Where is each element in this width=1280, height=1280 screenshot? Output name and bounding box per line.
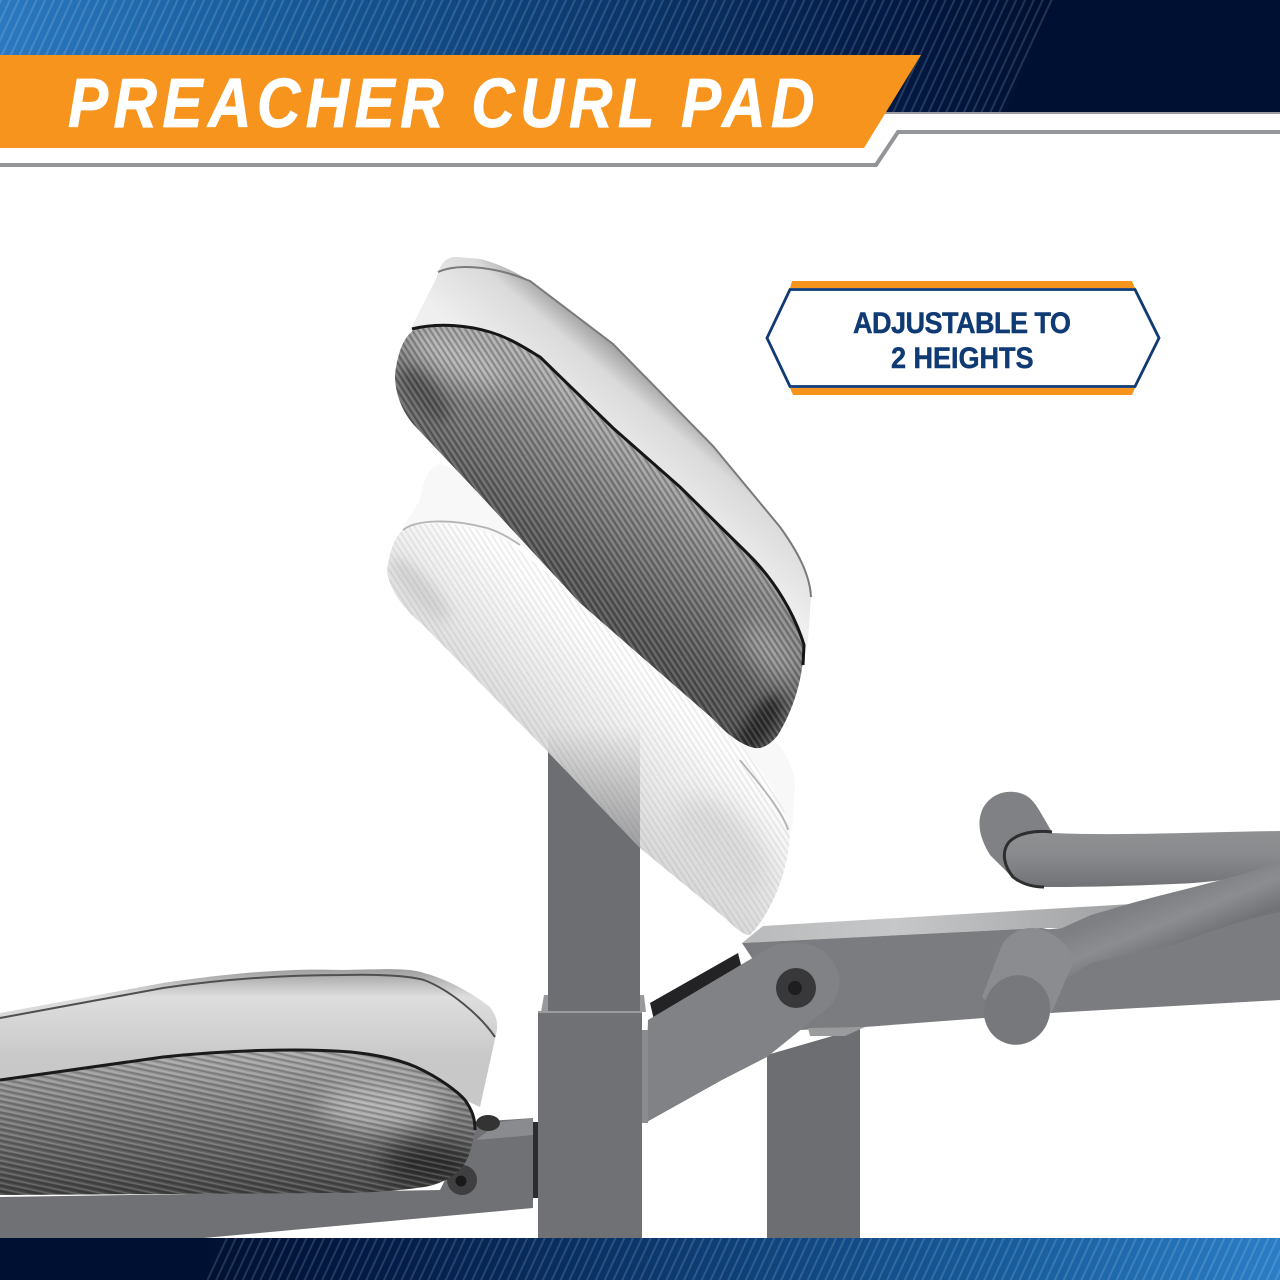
bench seat pad xyxy=(0,969,497,1200)
post seen through ghost pad xyxy=(548,739,640,848)
title banner xyxy=(0,55,921,148)
title: PREACHER CURL PAD xyxy=(68,64,814,142)
pivot bracket with bolt xyxy=(642,943,840,1123)
seat seam xyxy=(0,1050,475,1130)
top position pad xyxy=(380,257,820,761)
ghost pad face xyxy=(380,510,800,940)
post sleeve xyxy=(538,995,646,1238)
header grey rule xyxy=(0,132,1280,165)
seat side xyxy=(0,969,497,1107)
seat face xyxy=(0,1045,480,1200)
footer blue band xyxy=(0,1238,1280,1280)
pad face xyxy=(395,326,802,748)
handle tube xyxy=(1040,862,1280,985)
handle ring xyxy=(1004,831,1052,887)
icon: seat bolt xyxy=(447,1165,477,1195)
handle tube xyxy=(1004,831,1280,887)
upper roller handle xyxy=(979,792,1280,887)
bench rail beam xyxy=(742,880,1280,1036)
pad seam xyxy=(412,325,804,665)
pad side xyxy=(410,257,811,665)
ghost pad side xyxy=(403,464,795,832)
seat frame bracket xyxy=(0,1115,538,1238)
callout: adjustable to 2 heights xyxy=(767,281,1159,395)
header blue band xyxy=(0,0,1280,114)
ghost lower position pad xyxy=(387,520,790,936)
callout text xyxy=(853,307,1071,375)
callout text: ADJUSTABLE TO xyxy=(853,307,1071,340)
icon: bolt xyxy=(776,968,816,1008)
callout text: 2 HEIGHTS xyxy=(891,342,1034,375)
lower roller handle xyxy=(974,862,1280,1054)
main upright post xyxy=(548,752,640,1012)
handle cap body xyxy=(982,928,1072,1030)
ghost seam xyxy=(403,521,788,830)
rear support post xyxy=(767,1028,860,1238)
handle end cap xyxy=(979,792,1052,882)
handle cap end xyxy=(974,966,1060,1054)
